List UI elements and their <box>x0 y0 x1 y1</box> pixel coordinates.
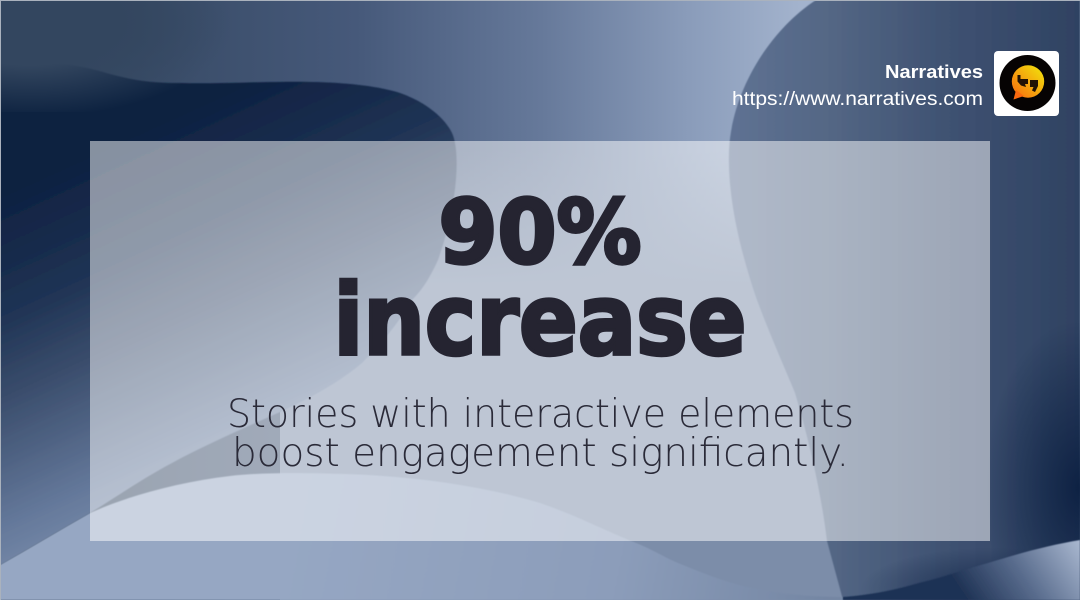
background shape: right dark wave <box>729 0 1080 600</box>
headline: increase: increase <box>334 264 746 378</box>
brand name: Narratives <box>885 62 983 82</box>
supporting text: Stories with interactive elements <box>227 392 854 437</box>
background shape: dark left wave <box>0 60 457 565</box>
brand url: https://www.narratives.com <box>732 89 983 110</box>
background shape: soft top left fade <box>0 0 240 112</box>
supporting text: boost engagement significantly. <box>232 431 849 476</box>
headline: 90%: 90% <box>438 181 642 284</box>
background shape: bottom right wedge <box>843 540 1080 600</box>
icon: narratives logo <box>994 51 1059 116</box>
background shape: deep shadow at bottom <box>860 530 1080 600</box>
panel: translucent card <box>90 141 990 541</box>
background shape: light lower blob <box>0 473 843 600</box>
background shape: deep shadow at right <box>920 320 1080 600</box>
supporting text <box>227 392 854 476</box>
